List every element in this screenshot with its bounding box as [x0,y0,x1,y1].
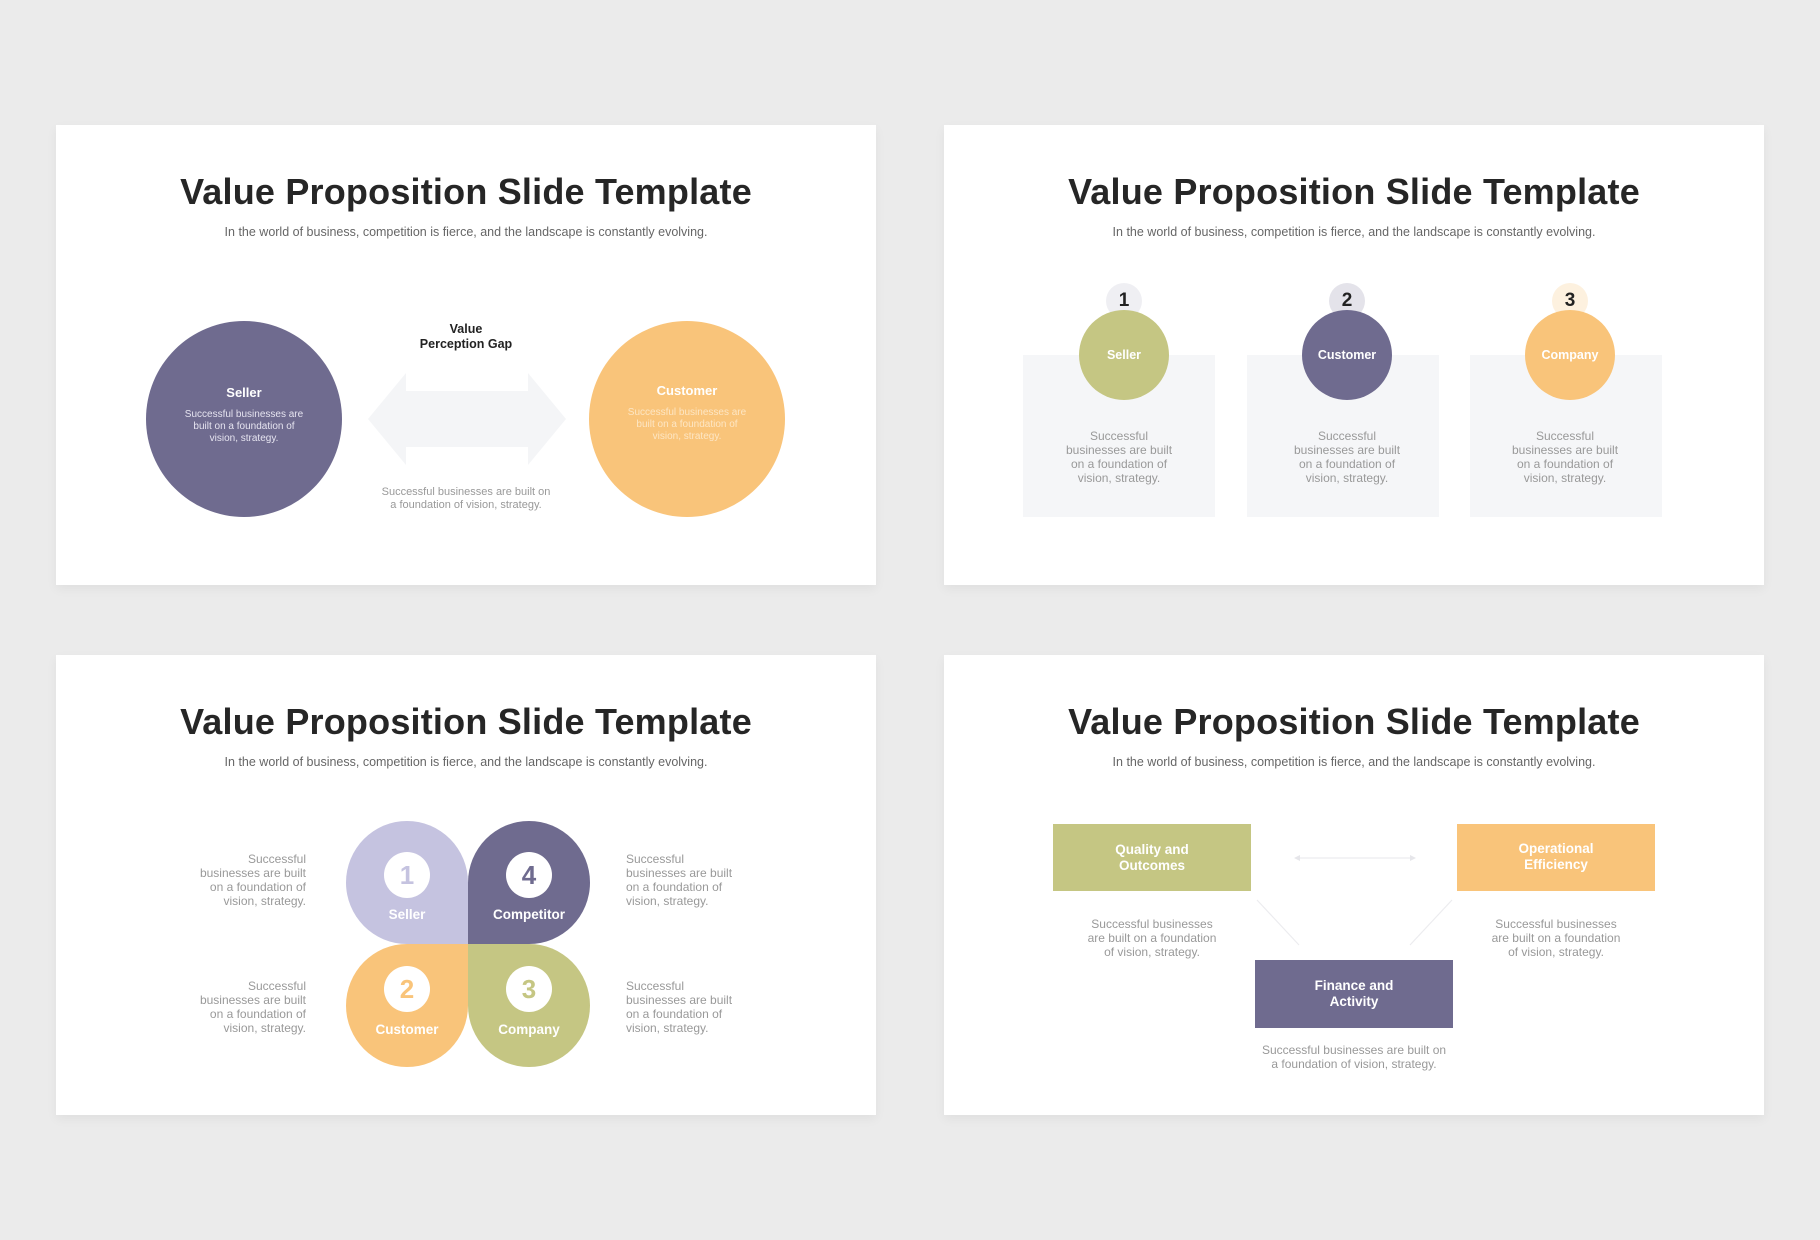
subtitle: In the world of business, competition is fierce, and the landscape is constantly evolving. [225,225,707,239]
customer text: built on a foundation of [636,419,738,430]
petal 2: customer [346,944,468,1067]
text: vision, strategy. [1306,471,1388,485]
text: right: are built on a foundation [1492,931,1620,945]
circle: seller: Seller [1107,348,1141,362]
panel: four petals [56,655,876,1115]
box: finance and activity: Finance and [1315,978,1393,993]
circle: company: Company [1542,348,1598,362]
arrow: double-headed [368,374,566,464]
text: left: of vision, strategy. [1104,945,1200,959]
petal 3: company: 3 [522,974,536,1004]
circle: seller [146,321,342,517]
gap text: a foundation of vision, strategy. [390,499,542,511]
text: bottom left: on a foundation of [210,1007,306,1021]
label: value perception gap [420,322,512,351]
box: operational efficiency: Efficiency [1524,857,1588,872]
petal 1: seller: 1 [400,860,414,890]
text: Successful [1536,429,1594,443]
customer text: vision, strategy. [653,431,721,442]
text: bottom left: businesses are built [200,993,306,1007]
box: quality and outcomes: Quality and [1115,842,1189,857]
petal 3: company: Company [498,1022,560,1037]
petal diagram [346,821,590,1067]
subtitle: In the world of business, competition is fierce, and the landscape is constantly evolving. [1113,755,1595,769]
text: top left: on a foundation of [210,880,306,894]
text: top right: businesses are built [626,866,732,880]
petal 1: seller: Seller [389,907,425,922]
column 2: customer [1247,283,1439,517]
box: finance and activity: Activity [1330,994,1378,1009]
panel: three columns [944,125,1764,585]
title: Value Proposition Slide Template [180,701,752,742]
box: operational efficiency [1457,824,1655,891]
text: bottom: Successful businesses are built on [1262,1043,1446,1057]
circle: customer: Customer [1318,348,1376,362]
text: top right: Successful [626,852,684,866]
petal 2: customer: Customer [375,1022,438,1037]
panel: three boxes [944,655,1764,1115]
circle: company [1525,310,1615,400]
text: top right: vision, strategy. [626,894,708,908]
text: left: are built on a foundation [1088,931,1216,945]
text: bottom [1262,1043,1446,1071]
text: top left: vision, strategy. [224,894,306,908]
box: quality and outcomes: Outcomes [1119,858,1185,873]
seller text: Successful businesses are [185,409,303,420]
text: on a foundation of [1299,457,1395,471]
arrows: connectors [1256,855,1452,945]
text: left: Successful businesses [1091,917,1213,931]
panel: seller vs customer [56,125,876,585]
text: bottom right: on a foundation of [626,1007,722,1021]
customer text: Successful businesses are [628,407,746,418]
text: vision, strategy. [1078,471,1160,485]
petal 3: company [468,944,590,1067]
text: Successful [1318,429,1376,443]
seller text: built on a foundation of [193,421,295,432]
badge 3 [1552,283,1588,319]
circle: customer [589,321,785,517]
badge 1: 1 [1119,290,1129,311]
customer label: Customer [657,383,717,398]
text: on a foundation of [1071,457,1167,471]
text: right [1492,917,1620,959]
text: bottom left [200,979,306,1035]
text [1294,429,1400,485]
text: businesses are built [1512,443,1618,457]
title: Value Proposition Slide Template [180,171,752,212]
seller label: Seller [226,385,262,400]
text: businesses are built [1066,443,1172,457]
title: Value Proposition Slide Template [1068,701,1640,742]
text: bottom left: Successful [248,979,306,993]
text: top left: Successful [248,852,306,866]
petal 4: competitor [468,821,590,944]
gap text [382,486,550,511]
text: top left [200,852,306,908]
text [1066,429,1172,485]
column 1: seller [1023,283,1215,517]
badge 2 [1329,283,1365,319]
text: right: Successful businesses [1495,917,1617,931]
text: vision, strategy. [1524,471,1606,485]
box: quality and outcomes [1053,824,1251,891]
text: bottom: a foundation of vision, strategy. [1271,1057,1437,1071]
text [1512,429,1618,485]
customer text [628,407,746,442]
text: bottom right: vision, strategy. [626,1021,708,1035]
badge 2: 2 [1342,290,1352,311]
badge 3: 3 [1565,290,1575,311]
subtitle: In the world of business, competition is fierce, and the landscape is constantly evolving. [225,755,707,769]
text: bottom left: vision, strategy. [224,1021,306,1035]
subtitle: In the world of business, competition is fierce, and the landscape is constantly evolving. [1113,225,1595,239]
text: top left: businesses are built [200,866,306,880]
text: bottom right: Successful [626,979,684,993]
seller text [185,409,303,444]
circle: customer [1302,310,1392,400]
text: left [1088,917,1216,959]
text: bottom right [626,979,732,1035]
label: value perception gap: Perception Gap [420,337,512,351]
text: top right: on a foundation of [626,880,722,894]
box: operational efficiency: Operational [1518,841,1594,856]
petal 4: competitor: Competitor [493,907,565,922]
text: right: of vision, strategy. [1508,945,1604,959]
petal 4: competitor: 4 [522,860,536,890]
text: bottom right: businesses are built [626,993,732,1007]
text: businesses are built [1294,443,1400,457]
column 3: company [1470,283,1662,517]
circle: seller [1079,310,1169,400]
badge 1 [1106,283,1142,319]
label: value perception gap: Value [450,322,482,336]
petal 1: seller [346,821,468,944]
text: on a foundation of [1517,457,1613,471]
petal 2: customer: 2 [400,974,414,1004]
seller text: vision, strategy. [210,433,278,444]
text: Successful [1090,429,1148,443]
gap text: Successful businesses are built on [382,486,550,498]
title: Value Proposition Slide Template [1068,171,1640,212]
text: top right [626,852,732,908]
box: finance and activity [1255,960,1453,1028]
